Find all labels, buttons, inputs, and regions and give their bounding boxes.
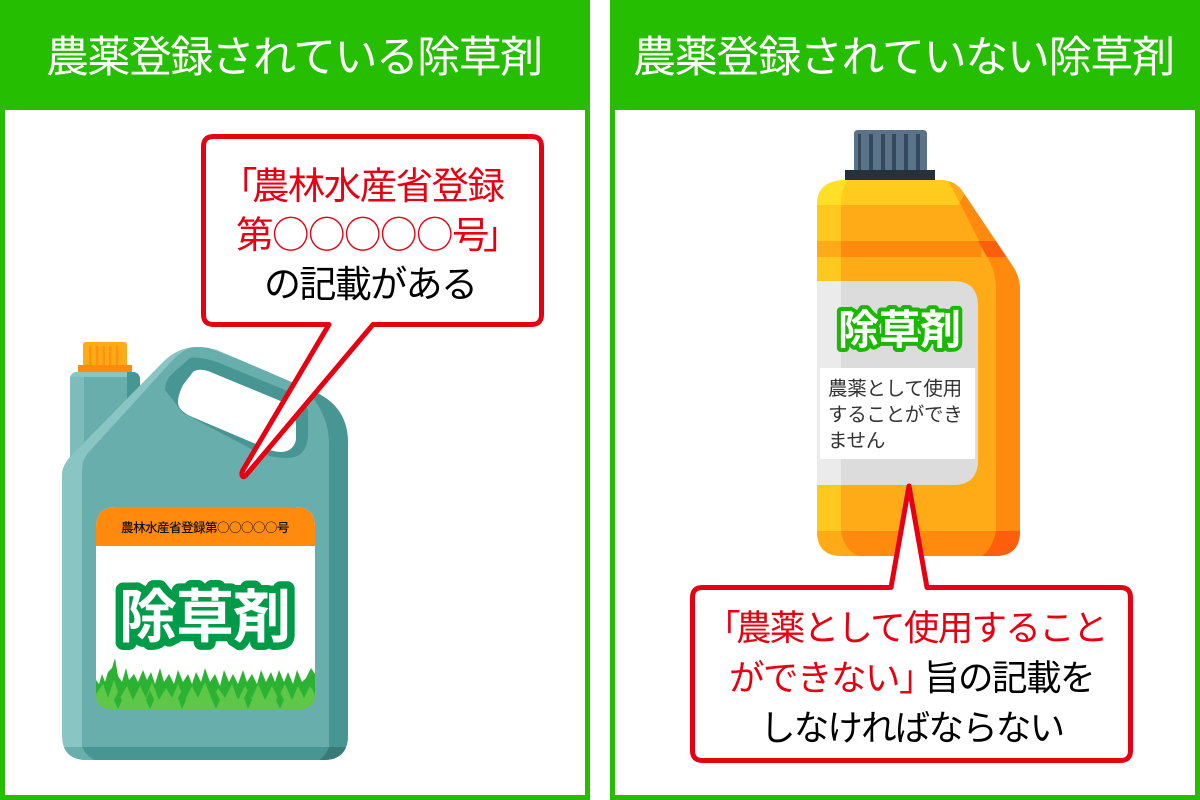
bottle warning text: 農薬として使用 — [828, 372, 962, 401]
bottle warning text — [820, 368, 975, 459]
callout: registration statement: 」 — [483, 204, 519, 259]
callout: registration statement: 「 — [220, 155, 257, 210]
callout: required statement: 「 — [705, 600, 740, 651]
panel: registered herbicide — [0, 0, 590, 800]
callout: required statement: 」 — [899, 650, 933, 701]
jug neck — [70, 372, 140, 457]
jug cap — [78, 342, 132, 372]
bottle warning text: することができ — [828, 398, 962, 427]
jug label — [96, 507, 315, 709]
bottle label — [817, 281, 978, 485]
callout: required statement: しなければならない — [760, 700, 1063, 751]
callout: registration statement: 第○○○○○号 — [236, 204, 488, 259]
grass — [96, 658, 315, 709]
label product name: 除草剤 — [119, 570, 290, 654]
callout: required statement: 旨の記載を — [924, 650, 1094, 701]
heading: registered herbicide: 農薬登録されている除草剤 — [46, 23, 542, 85]
callout: required statement: 農薬として使用すること — [736, 600, 1107, 651]
icon: teal herbicide jug — [60, 340, 350, 765]
callout: registration statement: 農林水産省登録 — [252, 155, 504, 210]
jug body — [60, 340, 350, 765]
panel: unregistered herbicide — [610, 0, 1200, 800]
callout: registration statement — [204, 136, 542, 477]
heading: unregistered herbicide: 農薬登録されていない除草剤 — [633, 23, 1174, 85]
label registration number: 農林水産省登録第○○○○○号 — [121, 517, 289, 536]
jug handle — [165, 358, 308, 458]
callout: required statement: ができない — [729, 650, 899, 701]
bottle product name: 除草剤 — [838, 296, 961, 356]
bottle warning text: ません — [828, 424, 885, 453]
callout: registration statement: の記載がある — [264, 254, 476, 308]
callout: required statement — [692, 486, 1130, 760]
bottle body — [815, 178, 1025, 558]
icon: orange herbicide bottle — [815, 130, 1025, 558]
bottle cap — [845, 130, 935, 180]
